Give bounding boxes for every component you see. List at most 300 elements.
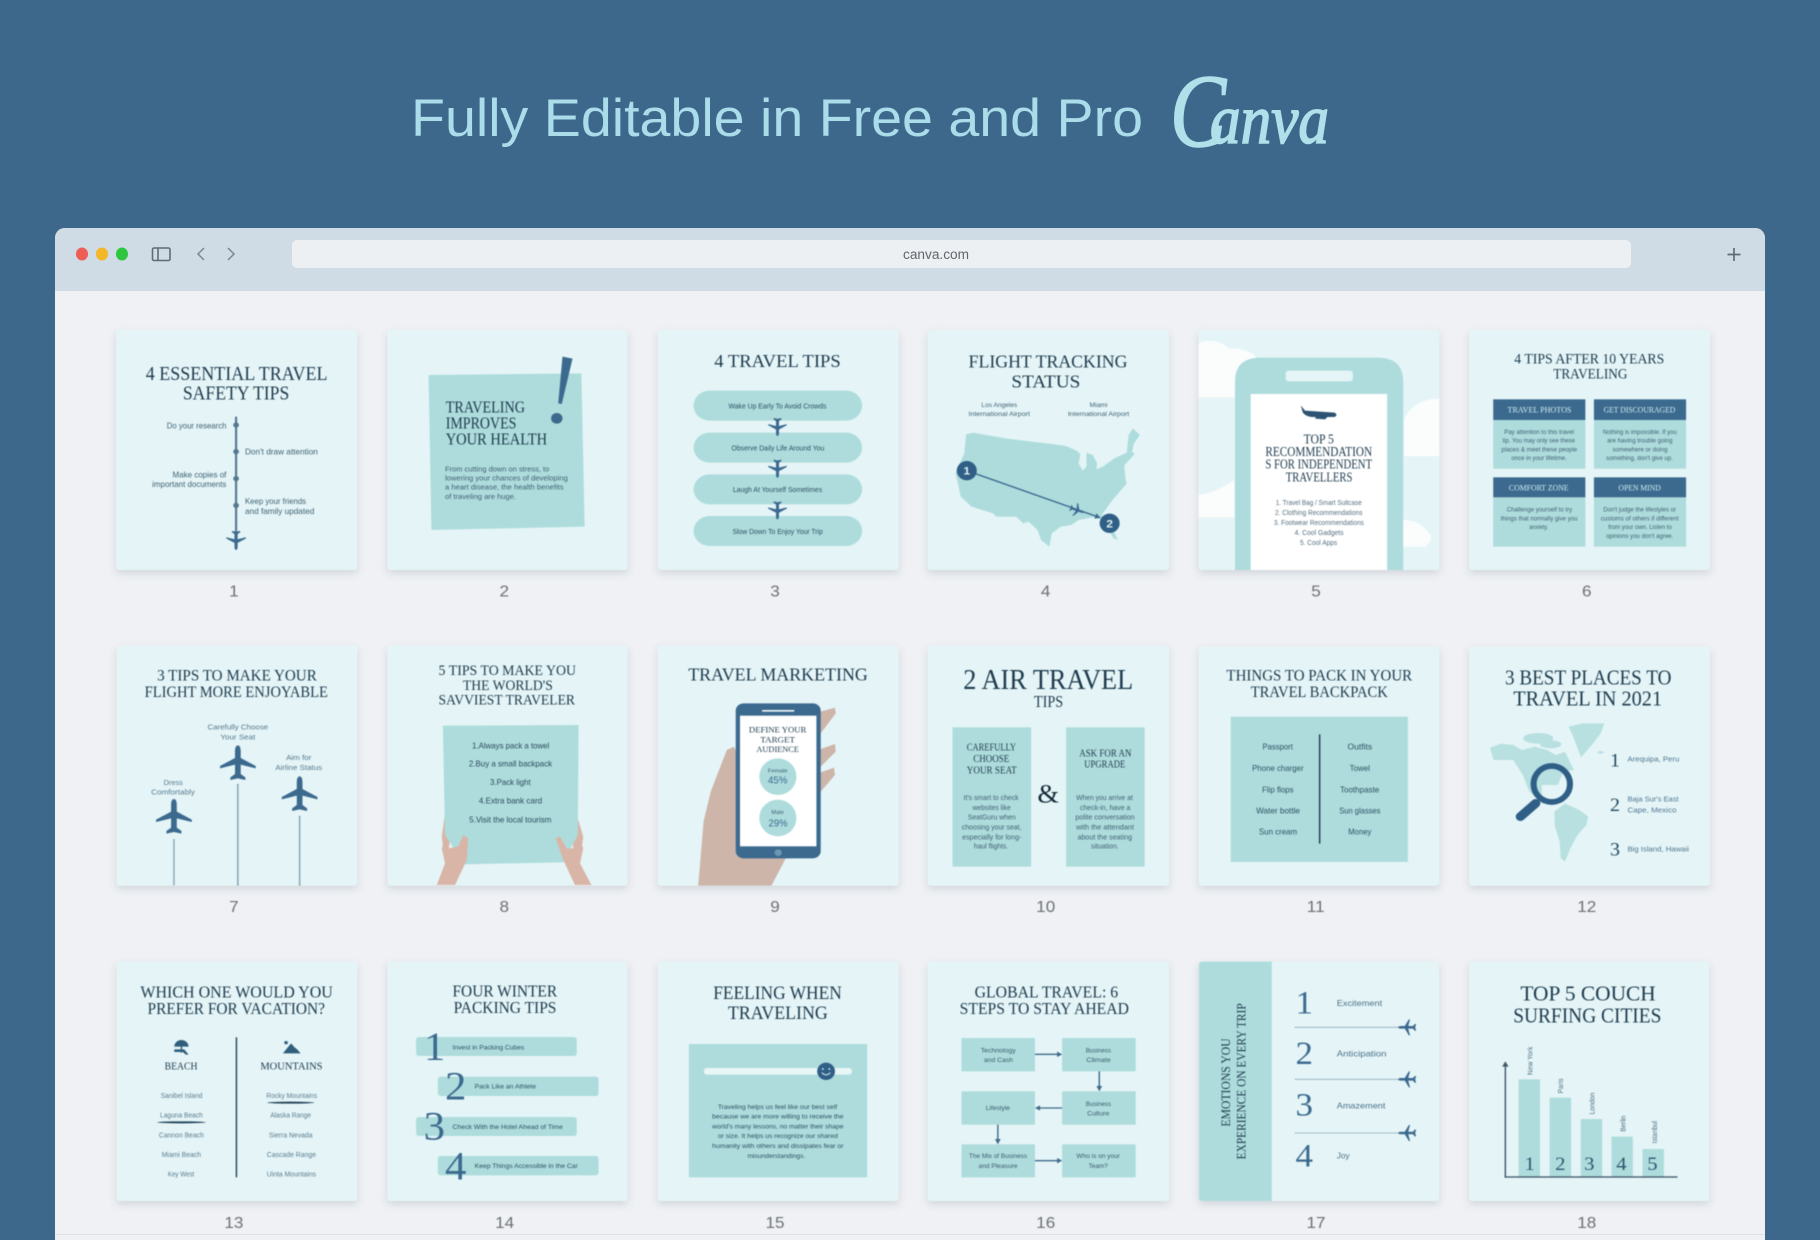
canva wordmark: anva [1210,82,1329,159]
title [452,981,557,1017]
big numerals: 2 [1296,1036,1313,1072]
title [969,352,1127,392]
phone body [1235,358,1403,570]
title: 5 TIPS TO MAKE YOU [439,662,576,679]
mountain list: Uinta Mountains [267,1170,316,1178]
title: 3 BEST PLACES TO [1505,666,1671,689]
list: 4. Cool Gadgets [1295,528,1344,537]
timeline labels: Do your research [167,421,227,430]
body text: a heart disease, the health benefits [445,483,564,492]
slider track [704,1068,852,1075]
title: TRAVEL MARKETING [688,665,868,685]
flow labels [969,1048,1121,1170]
pill labels: Slow Down To Enjoy Your Trip [732,527,823,536]
title [1513,982,1661,1027]
body text: Traveling helps us feel like our best self [718,1104,837,1111]
panel: ask for an upgrade: ASK FOR AN [1079,749,1132,759]
body text [711,1104,844,1160]
title [146,364,327,404]
airport labels [969,402,1129,418]
list [469,741,553,825]
title: WHICH ONE WOULD YOU [140,982,333,1001]
title [1265,432,1373,484]
mountain list: Rocky Mountains [266,1091,317,1100]
card 8: 5 tips to make you the world's savviest traveler [387,646,627,916]
icon: planes [1398,1019,1416,1141]
big numerals: 1 [1296,985,1313,1021]
tip: open mind: customs of others if different [1601,516,1679,522]
tip labels: Invest in Packing Cubes [452,1045,525,1051]
icon: exclamation mark [551,357,572,424]
mountain list: Cascade Range [267,1150,316,1159]
tip: get discouraged: somewhere or doing [1612,447,1668,453]
big numerals: 4 [1296,1139,1313,1174]
tip: comfort zone [1493,477,1585,547]
tip labels: Dress [164,778,183,787]
card 12: 3 best places to travel in 2021 [1469,647,1710,916]
timeline labels: Don't draw attention [245,447,318,456]
list: 5.Visit the local tourism [469,815,552,825]
icon: new tab plus [1728,248,1740,261]
title: TRAVELING [728,1003,828,1024]
list: 1. Travel Bag / Smart Suitcase [1276,498,1362,507]
title: SAVVIEST TRAVELER [439,692,576,708]
panel: ask for an upgrade: check-in, have a [1080,803,1131,812]
bar numbers: 3 [1584,1154,1594,1175]
icon: magnifying glass [1520,766,1570,817]
number label: 18 [1577,1214,1596,1232]
tip: get discouraged: GET DISCOURAGED [1604,405,1676,415]
icon: smiley slider handle [817,1063,835,1080]
destination numbers: 2 [1610,796,1620,816]
bar numbers [1524,1154,1658,1175]
timeline labels: Keep your friends [245,496,306,506]
mountain list [266,1091,317,1178]
left list: Water bottle [1256,806,1300,815]
destination labels [1627,755,1689,854]
icon: back and forward chevrons [198,248,234,260]
number label: 1 [229,582,239,601]
flow labels: Team? [1089,1163,1108,1170]
number label: 5 [1311,582,1321,601]
title [1514,351,1664,382]
timeline labels: important documents [152,479,226,489]
flow labels: Climate [1086,1057,1111,1064]
tip: travel photos: Pay attention to this travel [1504,429,1574,436]
card 14: four winter packing tips [387,962,627,1232]
title: FLIGHT MORE ENJOYABLE [145,683,328,701]
tip labels: Keep Things Accessible in the Car [475,1163,579,1170]
tip labels [452,1045,579,1170]
pill labels: Observe Daily Life Around You [731,444,824,453]
tip: get discouraged [1594,399,1686,469]
tip: travel photos: tip. You may only see these [1502,438,1575,445]
title: 3 TIPS TO MAKE YOUR [157,666,318,685]
panel: choose your seat: websites like [972,803,1011,812]
body text: humanity with others and dissipates fear or [712,1143,844,1150]
title: RECOMMENDATION [1265,444,1372,459]
number label: 2 [500,582,509,601]
list: 3. Footwear Recommendations [1274,518,1364,527]
number label: 4 [1041,582,1050,601]
icon: sidebar [152,248,170,260]
emotion labels [1337,998,1387,1160]
tip: comfort zone: Challenge yourself to try [1507,507,1573,514]
title: FLIGHT TRACKING [969,352,1127,372]
icon: three planes [156,745,317,834]
card 3: 4 travel tips [658,330,899,601]
screen heading: TARGET [760,735,796,745]
marker 1 [957,461,977,480]
number label: 13 [224,1214,243,1232]
pill labels: Laugh At Yourself Sometimes [733,485,822,494]
headline: Fully Editable in Free and Pro [411,89,1143,148]
title: TRAVELING [1553,366,1628,382]
ampersand: & [1037,780,1059,808]
marker 2 [1100,514,1120,533]
screen heading: AUDIENCE [756,744,799,754]
vertical title: EMOTIONS YOU [1219,1038,1233,1127]
body text: because we are more willing to receive the [712,1114,844,1120]
flow boxes [961,1038,1136,1177]
card 6: 4 tips after 10 years traveling [1469,330,1710,601]
dashed contrails [174,784,300,886]
left list: Sun cream [1259,827,1297,837]
panel [689,1044,867,1177]
airport labels: Los Angeles [981,402,1018,409]
tip: open mind: opinions you don't agree. [1606,533,1673,540]
tip: travel photos [1493,399,1585,469]
phone [736,703,821,858]
number label: 7 [229,898,239,916]
bar city labels: Paris [1558,1078,1565,1093]
body text: or size. It helps us recognize our shared [718,1133,838,1140]
divider [236,1037,237,1177]
hands holding paper [437,835,591,885]
title [713,983,842,1024]
canva wordmark [1170,54,1329,169]
number label: 8 [500,898,509,916]
phone screen [1251,394,1387,570]
bar city labels [1527,1046,1659,1143]
title [439,662,576,708]
panel: ask for an upgrade [1066,727,1145,867]
card 18: top 5 couch surfing cities [1469,962,1709,1232]
pill labels: Wake Up Early To Avoid Crowds [729,402,827,411]
title: PREFER FOR VACATION? [147,999,325,1018]
flow arrows [995,1052,1102,1163]
browser toolbar [55,228,1765,291]
tip labels: Carefully Choose [207,723,269,731]
tip: travel photos: TRAVEL PHOTOS [1507,405,1571,415]
airport labels: Miami [1090,402,1108,409]
title: TIPS [1034,693,1063,711]
destination labels: Cape, Mexico [1627,806,1677,815]
destination numbers: 3 [1610,840,1620,860]
left list: Passport [1262,742,1293,752]
tip numbers: 3 [424,1104,445,1148]
big numerals: 3 [1296,1088,1313,1123]
title: 4 TRAVEL TIPS [714,352,841,372]
title: THE WORLD'S [463,677,553,694]
tip: open mind: OPEN MIND [1619,483,1661,492]
panel: choose your seat [952,727,1031,867]
vertical title: EXPERIENCE ON EVERY TRIP [1234,1003,1248,1159]
paper [443,725,579,864]
beach list: Sanibel Island [161,1091,202,1100]
bar city labels: Istanbul [1652,1121,1659,1143]
card 1: 4 essential travel safety tips [116,330,357,601]
card 5: top 5 recommendations [1199,330,1439,601]
title: TRAVEL BACKPACK [1251,683,1388,701]
tip labels: Your Seat [220,733,256,741]
body text: misunderstandings. [747,1153,805,1160]
window controls [76,248,128,260]
panel: ask for an upgrade: When you arrive at [1076,793,1133,802]
map: americas [1490,723,1604,862]
title: TRAVEL IN 2021 [1513,687,1662,710]
title [140,982,333,1018]
marker 2: 2 [1106,518,1114,530]
title: TOP 5 COUCH [1520,982,1656,1005]
flow labels: Business [1086,1101,1112,1108]
card 16: global travel flowchart [928,962,1169,1232]
timeline labels: and family updated [245,506,315,516]
card 11: things to pack [1199,647,1439,916]
panel: choose your seat: CAREFULLY [967,743,1016,753]
flow labels: and Pleasure [979,1163,1018,1170]
tip labels: Check With the Hotel Ahead of Time [452,1124,563,1131]
number label: 17 [1307,1214,1326,1232]
panel: ask for an upgrade: with the attendant [1075,823,1134,832]
title: STATUS [1011,372,1080,392]
airport labels: International Airport [1068,411,1129,418]
tip numbers: 1 [424,1024,445,1069]
address bar [292,240,1631,268]
bar numbers: 2 [1555,1154,1566,1175]
card 7: 3 tips to make your flight more enjoyable [117,646,357,916]
emotion labels: Joy [1337,1151,1350,1160]
number label: 6 [1582,582,1592,601]
tip: comfort zone: anxiety. [1529,524,1548,531]
title: STEPS TO STAY AHEAD [960,1000,1129,1018]
panel: ask for an upgrade: situation. [1091,842,1119,851]
title [446,397,547,449]
flow labels: Lifestyle [986,1105,1010,1112]
title [145,666,328,701]
list: 4.Extra bank card [479,796,543,806]
body text [445,465,568,501]
title: SAFETY TIPS [183,383,289,404]
hand behind paper: outer fingers [442,813,583,863]
title: FOUR WINTER [452,981,557,1000]
tip labels: Airline Status [275,763,322,772]
panel: choose your seat: YOUR SEAT [967,766,1017,776]
card 9: travel marketing [658,646,899,916]
panel: choose your seat: especially for long- [962,833,1022,841]
list: 5. Cool Apps [1300,538,1337,547]
pill steps [694,391,862,546]
number label: 11 [1307,898,1325,916]
phone speaker [1286,371,1353,381]
destination labels: Big Island, Hawaii [1627,845,1689,854]
card 10: 2 air travel tips [928,646,1169,916]
packing panel [1231,717,1408,862]
title: YOUR HEALTH [446,429,547,449]
bar city labels: Berlin [1621,1116,1628,1132]
column headings [165,1062,323,1072]
right list: Towel [1350,763,1370,773]
title [960,983,1129,1018]
browser window [55,228,1765,1240]
title: S FOR INDEPENDENT [1265,457,1373,472]
number label: 9 [770,898,780,916]
panel: choose your seat: choosing your seat, [962,823,1021,832]
title: IMPROVES [446,413,516,433]
tip: get discouraged: Nothing is impossible. If you [1603,429,1677,436]
flow labels: Technology [981,1048,1016,1055]
panel: ask for an upgrade: about the seating [1077,833,1132,841]
flow labels: Culture [1087,1111,1109,1117]
flow labels: Business [1086,1048,1112,1055]
number label: 14 [495,1214,514,1232]
title: SURFING CITIES [1513,1004,1661,1027]
beach list: Key West [168,1170,194,1178]
chart axes [1502,1061,1677,1178]
tip: comfort zone: COMFORT ZONE [1509,483,1569,492]
tip labels: Comfortably [151,788,195,797]
panel: choose your seat: CHOOSE [973,754,1009,765]
emotion labels: Amazement [1337,1101,1386,1110]
paper note [429,373,585,530]
left list: Phone charger [1252,763,1304,773]
right list [1339,742,1380,837]
stat: male: Male [771,810,784,816]
panel: choose your seat: It's smart to check [964,793,1019,802]
tip numbers [424,1024,467,1188]
title: FEELING WHEN [713,983,842,1004]
destination numbers: 1 [1610,751,1620,771]
card 2: traveling improves your health [387,330,627,601]
body text: of traveling are huge. [445,492,516,501]
destination labels: Baja Sur's East [1627,795,1679,803]
timeline [226,417,246,550]
list: 3.Pack light [490,777,531,787]
title [963,665,1133,711]
title: 4 ESSENTIAL TRAVEL [146,364,327,385]
tip: travel photos: once in your lifetime. [1511,455,1567,462]
map: united states [955,428,1140,547]
card 15: feeling when traveling [658,962,899,1232]
flow labels: Who is on your [1076,1153,1121,1160]
stat: male: 29% [769,819,787,829]
flight path [967,471,1101,519]
vertical title [1219,1003,1248,1159]
right list: Toothpaste [1340,785,1380,795]
title: THINGS TO PACK IN YOUR [1226,666,1413,685]
tip numbers: 2 [445,1064,466,1108]
column headings: BEACH [165,1062,198,1072]
body text: lowering your chances of developing [445,474,568,483]
tip labels [151,723,322,797]
list: 2.Buy a small backpack [469,759,553,768]
side panel [1199,962,1272,1201]
bar city labels: London [1589,1093,1596,1114]
right list: Outfits [1347,742,1372,752]
title [1226,666,1413,701]
address bar: canva.com [903,247,969,262]
beach list: Cannon Beach [159,1131,204,1139]
title: TOP 5 [1304,432,1334,446]
body text: world's many lessons, no matter their shape [711,1124,844,1130]
mountain list: Alaska Range [270,1111,311,1120]
flow labels: The Mix of Business [969,1153,1028,1160]
stat: female: Female [768,768,788,774]
title [1505,666,1671,710]
card 13: which one would you prefer [117,962,357,1232]
emotion labels: Excitement [1337,998,1383,1008]
screen heading [749,725,806,754]
beach list: Miami Beach [162,1150,201,1159]
icon: mountains [283,1041,301,1053]
emotion labels: Anticipation [1337,1049,1387,1058]
bar numbers: 5 [1647,1154,1658,1175]
bar numbers: 1 [1524,1154,1535,1175]
tip: comfort zone: things that normally give you [1501,516,1578,522]
panel: choose your seat: SeatGuru when [968,813,1016,822]
clouds [1199,341,1439,547]
title: 4 TIPS AFTER 10 YEARS [1514,351,1664,367]
headline [411,54,1329,169]
tip: open mind: Don't judge the lifestyles or [1603,507,1677,514]
mountain list: Sierra Nevada [269,1131,313,1139]
bar numbers: 4 [1616,1154,1627,1175]
title: TRAVELLERS [1286,470,1352,484]
tip: open mind: from your own. Listen to [1608,524,1672,531]
icon: plane side view [1301,405,1336,419]
hand holding phone [698,708,836,886]
stat: female: 45% [768,776,787,787]
icon: beach umbrella [174,1040,189,1055]
panel: ask for an upgrade: polite conversation [1075,813,1135,822]
airport labels: International Airport [969,411,1030,418]
title: PACKING TIPS [454,998,556,1017]
icon: planes between steps [768,418,787,519]
number label: 12 [1577,898,1596,916]
tip labels: Aim for [286,753,312,762]
left list: Flip flops [1262,785,1294,795]
number label: 10 [1036,898,1055,916]
title: GLOBAL TRAVEL: 6 [975,983,1119,1001]
beach list: Laguna Beach [160,1111,203,1120]
timeline labels [152,421,318,516]
title: 2 AIR TRAVEL [963,665,1133,696]
beach list [159,1091,204,1178]
body text: From cutting down on stress, to [445,465,549,473]
canva wordmark: C [1170,54,1227,169]
title: TRAVELING [446,397,525,417]
big numerals [1296,985,1313,1174]
bar city labels: New York [1527,1046,1535,1075]
tip: get discouraged: something, don't give up. [1606,455,1673,462]
column headings: MOUNTAINS [260,1062,323,1072]
screen heading: DEFINE YOUR [749,725,806,734]
tip numbers: 4 [445,1144,467,1188]
pill labels [729,402,827,536]
tip labels: Pack Like an Athlete [475,1084,536,1091]
list: 1.Always pack a towel [472,741,549,750]
tip: get discouraged: are having trouble going [1607,438,1673,445]
